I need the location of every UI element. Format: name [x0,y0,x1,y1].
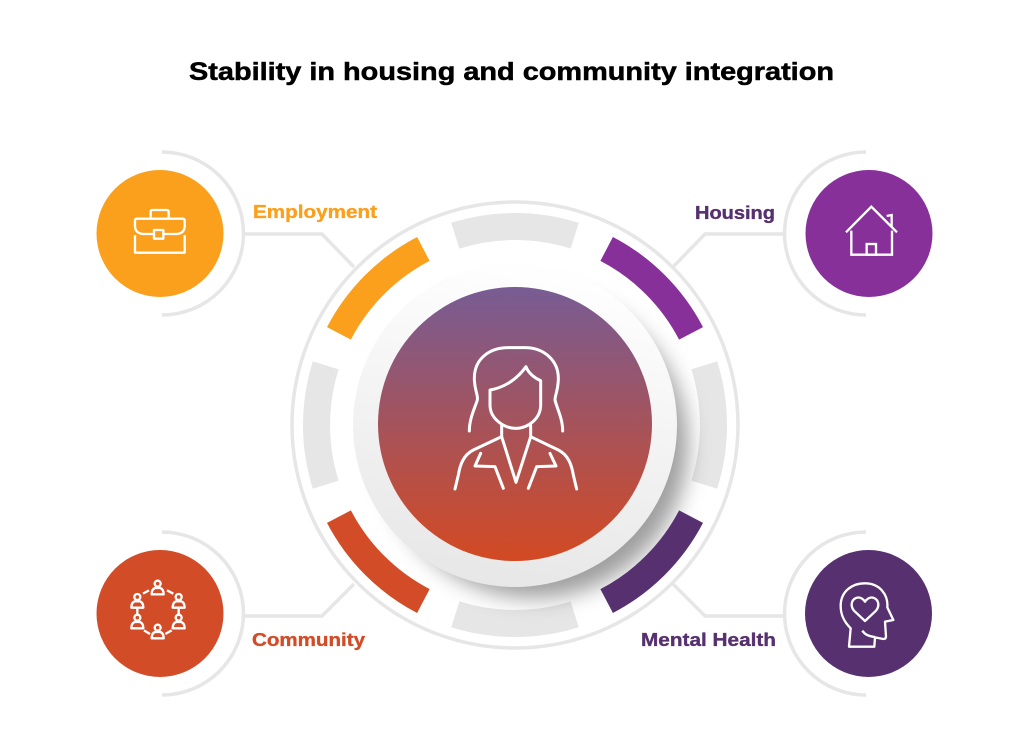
icon: woman [455,348,577,489]
centre gradient disc [378,287,652,561]
label: Mental Health [641,630,776,650]
icon: people circle [131,581,185,638]
segment: mental health dark purple [600,510,703,613]
segment: housing purple [600,237,703,340]
circle [96,550,224,677]
panel: mental health [641,532,932,695]
central ring diagram [292,202,738,648]
label: Community [252,630,365,650]
outer ring [292,202,738,648]
disc shadow [382,292,688,598]
connector [673,234,784,267]
segment: right grey [691,361,727,489]
arc [785,152,866,315]
centre plate [353,263,677,587]
icon: head with heart [841,583,893,647]
label: Employment [253,202,377,222]
segment: employment orange [327,237,430,340]
connector [245,584,354,616]
segment: bottom grey [451,601,579,637]
panel: employment [96,152,377,315]
label: Housing [695,203,775,223]
panel: community [96,532,365,695]
connector [673,584,784,616]
arc [162,152,243,315]
title: Stability in housing and community integration [189,58,834,86]
icon: house [846,207,897,255]
segment: community red [327,510,430,613]
panel: housing [673,152,932,315]
segment: top grey [451,213,579,249]
segment: left grey [303,361,339,489]
circle [805,550,932,677]
circle [806,170,932,297]
arc [785,532,866,695]
arc [162,532,243,695]
circle [96,170,224,297]
connector [245,234,354,267]
icon: briefcase [135,210,185,253]
